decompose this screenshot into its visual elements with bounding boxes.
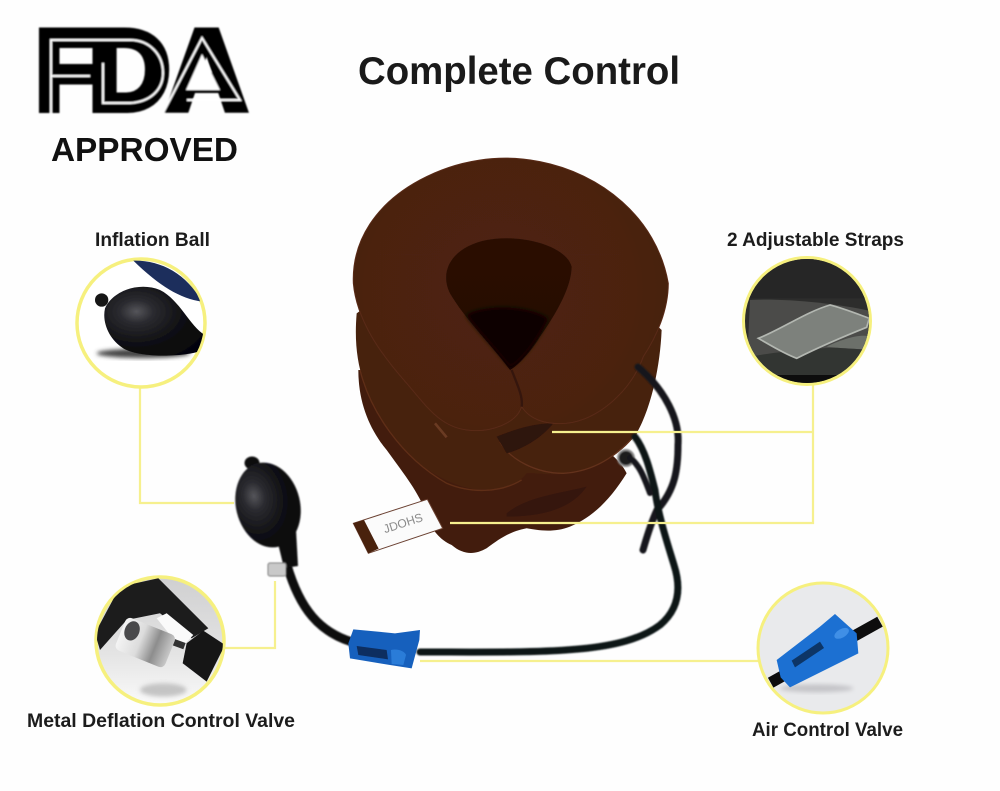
blue air valve bbox=[348, 629, 420, 668]
inflation bulb bbox=[227, 456, 309, 576]
FDA logo: D bbox=[89, 8, 170, 133]
neck pillow bbox=[353, 158, 668, 553]
approved label: APPROVED bbox=[51, 131, 238, 168]
FDA logo: A bbox=[167, 9, 246, 133]
deflation valve bbox=[268, 563, 286, 576]
label: metal deflation control valve: Metal Deflation Control Valve bbox=[27, 711, 295, 732]
label: adjustable straps: 2 Adjustable Straps bbox=[727, 230, 904, 251]
label: inflation ball: Inflation Ball bbox=[95, 230, 210, 251]
detail: adjustable strap bbox=[740, 257, 877, 387]
brand tag: JDOHS bbox=[382, 510, 425, 536]
detail: air control valve bbox=[758, 583, 888, 713]
connector lines bbox=[140, 383, 813, 661]
brand tag bbox=[353, 499, 443, 553]
detail: metal valve bbox=[95, 577, 225, 705]
label: air control valve: Air Control Valve bbox=[752, 720, 903, 741]
top pillow layer bbox=[353, 158, 668, 431]
FDA logo bbox=[36, 8, 246, 134]
middle pillow layer bbox=[356, 285, 662, 491]
FDA logo: F bbox=[36, 9, 94, 134]
pillow opening bbox=[446, 238, 572, 370]
air hose and tubes bbox=[287, 367, 678, 652]
title: Complete Control bbox=[358, 50, 680, 93]
bottom pillow layer bbox=[358, 370, 627, 553]
detail: inflation ball bbox=[77, 259, 205, 387]
